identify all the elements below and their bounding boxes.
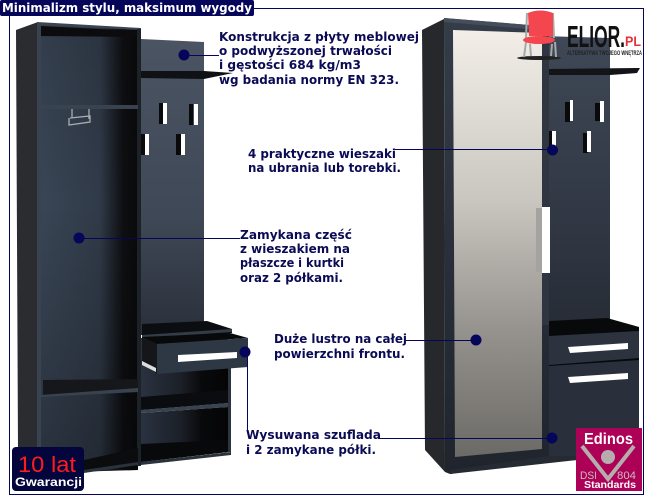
logo: Elior.pl: PL bbox=[625, 33, 641, 49]
right furniture: closed wardrobe with mirror bbox=[422, 18, 640, 474]
callout: closed section: Zamykana część bbox=[240, 228, 352, 242]
callout: hooks: na ubrania lub torebki. bbox=[248, 161, 401, 175]
callout: construction: wg badania normy EN 323. bbox=[219, 73, 399, 87]
left furniture: open wardrobe with drawer pulled out bbox=[16, 22, 248, 473]
callout: closed section bbox=[74, 228, 352, 285]
badge: 10 years warranty bbox=[12, 447, 84, 491]
hooks bbox=[549, 100, 604, 153]
callout: construction: Konstrukcja z płyty meblowej bbox=[219, 30, 419, 44]
callout: closed section: płaszcze i kurtki bbox=[240, 256, 344, 270]
badge: Edinos DSI 804 Standards: Edinos bbox=[584, 431, 633, 448]
callout: drawer: Wysuwana szuflada bbox=[246, 428, 381, 442]
callout: construction bbox=[178, 30, 419, 87]
callout: closed section: oraz 2 półkami. bbox=[240, 271, 343, 285]
callout: mirror: powierzchni frontu. bbox=[274, 347, 405, 361]
badge: Edinos DSI 804 Standards: 804 bbox=[617, 470, 636, 482]
callout: construction: o podwyższonej trwałości bbox=[219, 44, 392, 58]
callout: drawer: i 2 zamykane półki. bbox=[246, 443, 376, 457]
hooks bbox=[141, 103, 198, 155]
badge: Edinos DSI 804 Standards: DSI bbox=[580, 470, 597, 482]
badge: 10 years warranty: 10 lat bbox=[18, 452, 76, 477]
badge: Edinos DSI 804 Standards bbox=[576, 428, 642, 491]
logo: Elior.pl bbox=[517, 10, 642, 60]
badge: Edinos DSI 804 Standards: Standards bbox=[584, 479, 636, 491]
callout: hooks: 4 praktyczne wieszaki bbox=[248, 147, 396, 161]
callout: closed section: z wieszakiem na bbox=[240, 242, 350, 256]
callout: mirror bbox=[274, 332, 482, 361]
callout: mirror: Duże lustro na całej bbox=[274, 332, 407, 346]
title banner: Minimalizm stylu, maksimum wygody bbox=[2, 1, 252, 15]
callout: construction: i gęstości 684 kg/m3 bbox=[219, 58, 361, 72]
callout: hooks bbox=[248, 144, 558, 175]
badge: 10 years warranty: Gwarancji bbox=[15, 475, 82, 489]
drawer bbox=[142, 333, 248, 374]
callout: drawer bbox=[240, 346, 558, 457]
hanger rail bbox=[69, 109, 90, 125]
